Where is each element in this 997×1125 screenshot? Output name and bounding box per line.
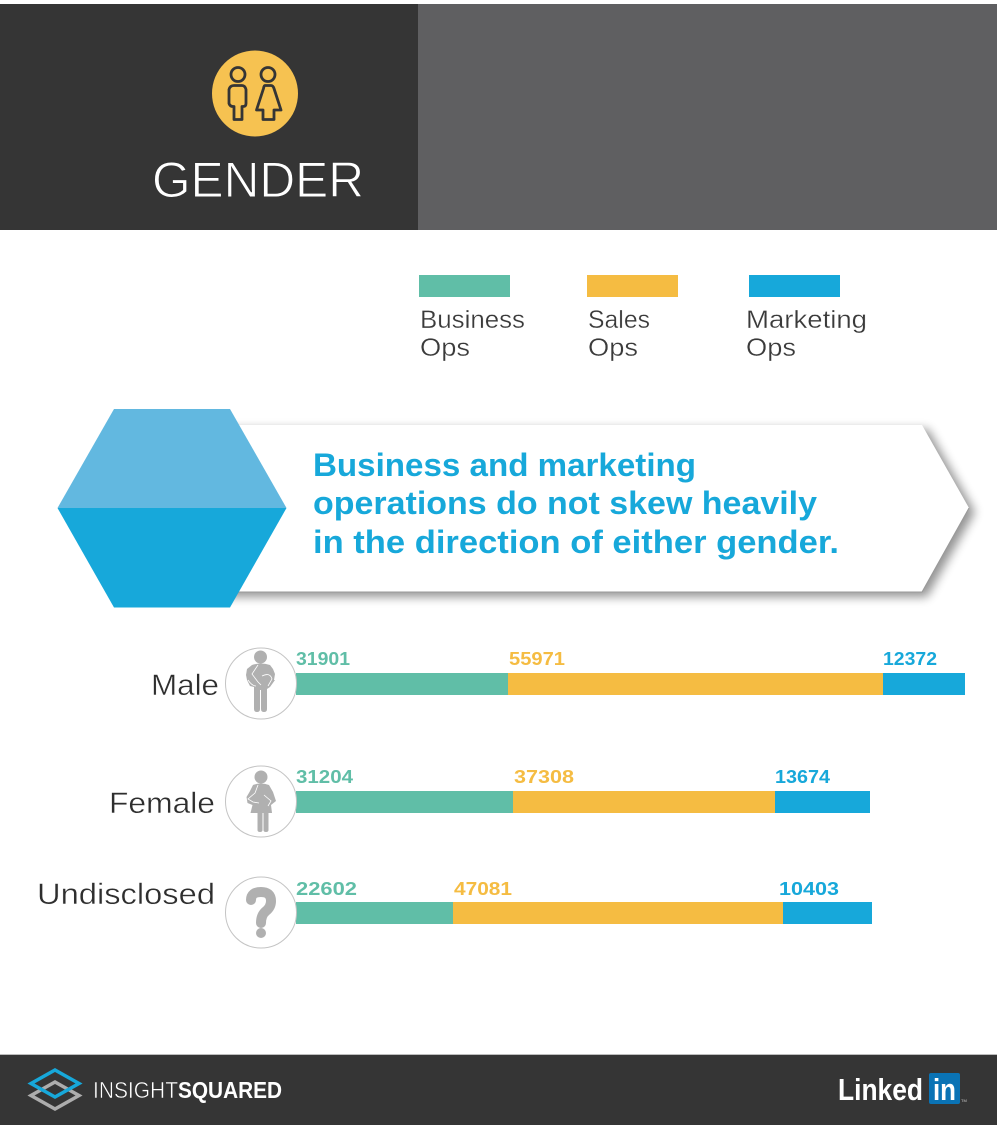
- values: male: 12372: [883, 648, 937, 669]
- legend: business ops: Business: [420, 306, 525, 334]
- icon: female figure: [226, 766, 296, 837]
- logo: linkedin: Linked: [838, 1072, 923, 1107]
- icon: male figure: [226, 648, 296, 719]
- callout arrow panel: [200, 425, 975, 597]
- values: female: 31204: [296, 766, 354, 787]
- logo: linkedin: TM: [961, 1098, 967, 1103]
- values: undisclosed: 22602: [296, 878, 357, 899]
- legend: marketing ops: Marketing: [746, 306, 867, 334]
- values: female: 37308: [514, 766, 574, 787]
- row: undisclosed: [37, 877, 872, 948]
- stacked bar: male: [296, 673, 965, 695]
- label: undisclosed: Undisclosed: [37, 878, 215, 911]
- icon: gender figures: [212, 50, 298, 136]
- values: male: 31901: [296, 648, 350, 669]
- footer: [0, 1054, 997, 1125]
- label: male: Male: [151, 669, 219, 702]
- legend: business ops: Ops: [420, 334, 470, 362]
- values: undisclosed: 10403: [779, 878, 839, 899]
- callout: [58, 409, 975, 608]
- header banner: [0, 4, 997, 230]
- row: female: [109, 766, 870, 837]
- callout text: Business and marketing: [313, 447, 696, 483]
- stacked bar: undisclosed: [296, 902, 872, 924]
- values: undisclosed: [296, 878, 839, 899]
- legend: sales ops: [587, 275, 678, 362]
- values: female: 13674: [775, 766, 831, 787]
- logo: linkedin: in: [933, 1072, 956, 1107]
- icon: hexagon: [58, 409, 286, 608]
- legend: business ops: [419, 275, 525, 362]
- stacked bar: female: [296, 791, 870, 813]
- icon: question mark: [226, 877, 296, 948]
- title: GENDER: [152, 152, 364, 208]
- values: male: [296, 648, 937, 669]
- values: undisclosed: 47081: [454, 878, 512, 899]
- legend: [419, 275, 867, 362]
- legend: marketing ops: [746, 275, 867, 362]
- legend: sales ops: Ops: [588, 334, 638, 362]
- legend: marketing ops: Ops: [746, 334, 796, 362]
- values: female: [296, 766, 831, 787]
- values: male: 55971: [509, 648, 565, 669]
- icon: insightsquared logo: [31, 1070, 79, 1109]
- callout text: [313, 447, 839, 560]
- callout text: operations do not skew heavily: [313, 485, 817, 521]
- callout text: in the direction of either gender.: [313, 524, 839, 560]
- label: female: Female: [109, 787, 215, 820]
- legend: sales ops: Sales: [588, 306, 650, 334]
- logo text: insightsquared: INSIGHTSQUARED: [93, 1077, 282, 1103]
- row: male: [151, 648, 965, 719]
